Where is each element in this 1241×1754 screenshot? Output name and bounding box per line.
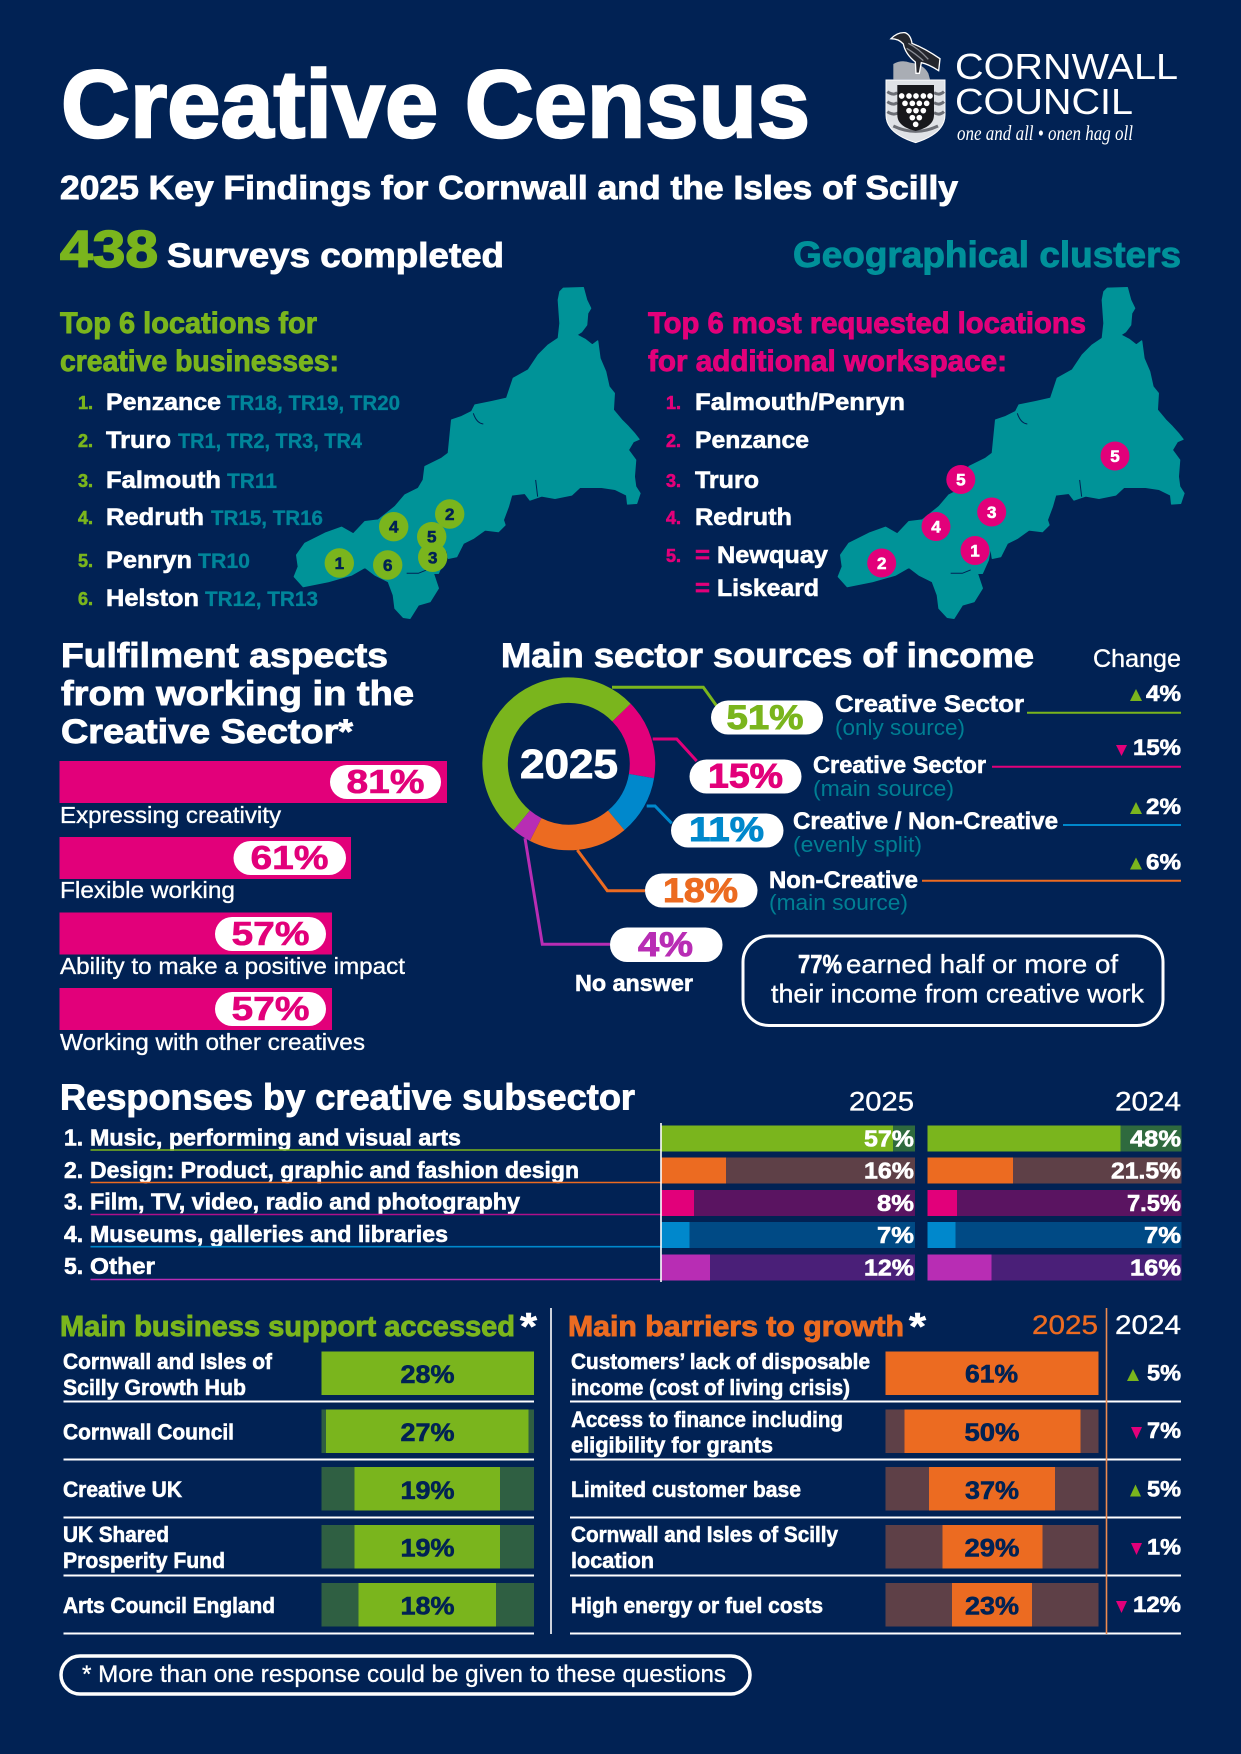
bar: flexible working: 61% (250, 839, 328, 876)
row: growth hub: 28% (400, 1361, 454, 1389)
map marker 1: 1 (970, 542, 980, 560)
heading: responses by creative subsector: Responses by creative subsector (60, 1076, 635, 1118)
row: access to finance: Access to finance including (571, 1407, 843, 1432)
callout: 77% earned half or more (743, 936, 1163, 1026)
bar: flexible working (60, 837, 351, 903)
heading: fulfilment aspects (61, 637, 414, 751)
heading: main barriers to growth: Main barriers to growth (568, 1311, 904, 1343)
row: arts council england: Arts Council England (63, 1593, 275, 1618)
row: access to finance: 50% (964, 1419, 1020, 1447)
footnote (61, 1656, 750, 1694)
bar: expressing creativity: Expressing creativity (60, 802, 281, 828)
change values: income sources (1116, 681, 1181, 874)
list: requested locations: Truro (695, 467, 759, 494)
column headings: subsector years: 2025 (849, 1086, 914, 1116)
logo: Cornwall Council (886, 33, 1178, 145)
bar: working with other creatives: 57% (232, 990, 310, 1027)
map marker 2 (867, 548, 896, 578)
table: responses by creative subsector (64, 1123, 1182, 1282)
row: location: location (571, 1548, 654, 1573)
column headings: barriers years: 2025 (1032, 1310, 1098, 1340)
map marker 2 (435, 499, 464, 529)
list: top 6 locations: TR11 (227, 470, 277, 493)
panel: main barriers to growth (570, 1349, 1181, 1634)
callout: 11% evenly split: Creative / Non-Creative (793, 808, 1058, 835)
row: access to finance: eligibility for grants (571, 1432, 773, 1458)
list: top 6 locations: 3. (78, 471, 93, 491)
heading: top 6 most requested locations: Top 6 most requested locations (648, 307, 1086, 340)
bar: flexible working: Flexible working (60, 877, 235, 903)
donut chart: income sources (495, 690, 642, 838)
list: requested locations: Liskeard (717, 575, 819, 602)
heading: main barriers to growth (568, 1306, 926, 1348)
heading: main sector sources of income: Main sector sources of income (501, 637, 1034, 675)
footnote: * More than one response could be given to these questions (82, 1661, 726, 1688)
logo wordmark (955, 46, 1178, 145)
list: top 6 locations: Redruth (106, 504, 204, 531)
row: limited customer base: 37% (965, 1477, 1019, 1505)
heading: change: Change (1093, 645, 1181, 673)
row: growth hub: Scilly Growth Hub (63, 1375, 246, 1400)
row: arts council england: 18% (400, 1592, 454, 1620)
row: limited customer base: Limited customer base (571, 1477, 801, 1502)
column headings: subsector years: 2024 (1115, 1086, 1181, 1116)
list: top 6 locations: Truro (106, 427, 171, 454)
list: top 6 locations: 4. (78, 508, 93, 528)
map marker 1 (960, 536, 990, 565)
row: film, tv, video, radio and photography: Film, TV, video, radio and photography (90, 1188, 520, 1214)
row: museums, galleries and libraries: Museums, galleries and libraries (90, 1221, 448, 1247)
heading: geographical clusters: Geographical clusters (793, 234, 1181, 275)
bar: positive impact: 57% (232, 915, 310, 952)
map marker 2: 2 (445, 505, 454, 524)
change: creative sector main down 15% (1116, 735, 1181, 760)
row: location (570, 1522, 1181, 1576)
column headings: barriers years (1032, 1310, 1181, 1340)
row: design (64, 1157, 1182, 1184)
row: museums, galleries and libraries (64, 1221, 1182, 1248)
callout: 18% non-creative main source: (main source) (769, 890, 908, 915)
heading: main business support accessed: Main business support accessed (60, 1311, 515, 1343)
callout: 4% no answer: No answer (575, 970, 693, 996)
callout: 11% evenly split (671, 808, 1181, 857)
panel: main business support (63, 1349, 534, 1634)
list: requested locations: Newquay (717, 542, 828, 569)
heading: fulfilment aspects: Creative Sector* (61, 713, 354, 751)
callout: 77% earned half or more: 77% (798, 949, 842, 979)
row: access to finance (570, 1407, 1181, 1460)
row: design: 21.5% (1111, 1158, 1181, 1184)
row: growth hub: Cornwall and Isles of (63, 1349, 272, 1374)
row: music, performing and visual arts: Music, performing and visual arts (90, 1124, 461, 1150)
row: uk shared prosperity fund: 19% (400, 1534, 454, 1562)
heading: top 6 most requested locations: for additional workspace: (648, 345, 1007, 378)
bar: positive impact (60, 912, 405, 979)
bar: expressing creativity (60, 761, 447, 828)
column headings: subsector years (849, 1086, 1181, 1116)
map marker 5 Newquay (946, 465, 975, 494)
list: requested locations: Penzance (695, 427, 809, 454)
row: energy or fuel costs: 23% (965, 1592, 1019, 1620)
row: energy or fuel costs (570, 1583, 1181, 1634)
connector lines (525, 687, 717, 944)
list: top 6 locations: Penryn (106, 547, 192, 574)
callout: 51% creative sector only source (711, 691, 1181, 740)
list: top 6 locations: 2. (78, 431, 93, 451)
list: top 6 locations: 5. (78, 551, 93, 571)
map: top 6 creative business locations (294, 288, 640, 618)
row: museums, galleries and libraries: 7% (1144, 1222, 1181, 1248)
map marker 5 Newquay: 5 (956, 470, 966, 490)
row: cornwall council (63, 1410, 534, 1460)
callout: 4% no answer (575, 926, 722, 996)
list: top 6 locations: TR1, TR2, TR3, TR4 (178, 430, 362, 453)
bar: expressing creativity: 81% (346, 763, 424, 800)
bar: positive impact: Ability to make a positive impact (60, 953, 405, 979)
row: music, performing and visual arts: 1. (64, 1124, 83, 1150)
callout: 18% non-creative main source: Non-Creative (769, 867, 918, 894)
row: location: Cornwall and Isles of Scilly (571, 1522, 838, 1547)
icon: raven and shield crest (886, 33, 945, 143)
row: creative uk: 19% (400, 1477, 454, 1505)
heading: main business support accessed: * (520, 1306, 537, 1348)
callout: 51% creative sector only source: Creative Sector (835, 691, 1024, 718)
list: requested locations: = (695, 575, 710, 602)
row: lack of disposable income: 61% (965, 1360, 1018, 1388)
row: location: 1% (1147, 1534, 1181, 1560)
map marker 3 (418, 543, 447, 572)
column headings: barriers years: 2024 (1115, 1310, 1181, 1340)
change: creative sector only up 4% (1130, 681, 1181, 706)
list: requested locations: 3. (666, 471, 681, 491)
row: music, performing and visual arts: 57% (864, 1126, 914, 1152)
row: creative uk (63, 1467, 534, 1518)
map: requested workspace locations (838, 288, 1184, 618)
row: music, performing and visual arts: 48% (1130, 1126, 1181, 1152)
row: lack of disposable income: 5% (1147, 1360, 1181, 1386)
callout: 51% creative sector only source: (only source) (835, 715, 965, 740)
row: film, tv, video, radio and photography: 8% (877, 1190, 914, 1216)
row: uk shared prosperity fund (63, 1522, 534, 1576)
bar: working with other creatives (60, 988, 365, 1055)
callout: 11% evenly split: 11% (689, 811, 764, 849)
row: limited customer base (570, 1467, 1181, 1518)
row: music, performing and visual arts (64, 1124, 1182, 1152)
list: top 6 locations: Penzance (106, 389, 221, 416)
map marker 3: 3 (428, 548, 437, 567)
heading: top 6 locations for creative businesses: Top 6 locations for (60, 307, 317, 340)
list: top 6 locations: Helston (106, 585, 199, 612)
map marker 5: 5 (427, 528, 436, 547)
list: top 6 locations: TR15, TR16 (211, 507, 323, 530)
row: film, tv, video, radio and photography (64, 1188, 1182, 1216)
callout: 51% creative sector only source: 51% (726, 699, 804, 737)
change: creative sector only up 4%: 4% (1146, 681, 1181, 706)
list: requested locations (666, 389, 905, 602)
callout: 15% creative sector main source: Creative Sector (813, 752, 986, 779)
row: film, tv, video, radio and photography: 7.5% (1127, 1190, 1181, 1216)
list: requested locations: 1. (666, 393, 681, 413)
map marker 4 (922, 512, 950, 541)
callout: 15% creative sector main source: (main source) (813, 776, 954, 801)
row: energy or fuel costs: High energy or fuel costs (571, 1593, 823, 1618)
logo wordmark: COUNCIL (955, 81, 1133, 122)
list: top 6 locations: 6. (78, 589, 93, 609)
list: top 6 locations: Falmouth (106, 467, 221, 494)
row: energy or fuel costs: 12% (1133, 1592, 1181, 1617)
callout: 15% creative sector main source: 15% (708, 758, 783, 796)
list: requested locations: Redruth (695, 504, 792, 531)
callout: 77% earned half or more: earned half or more of (846, 949, 1119, 979)
row: museums, galleries and libraries: 7% (877, 1222, 914, 1248)
title: Creative Census (61, 51, 810, 158)
surveys completed stat: 438 (60, 221, 158, 279)
heading: fulfilment aspects: Fulfilment aspects (61, 637, 388, 675)
surveys completed stat (60, 221, 504, 279)
map marker 3: 3 (987, 503, 996, 522)
row: design: Design: Product, graphic and fashion design (90, 1157, 579, 1183)
row: uk shared prosperity fund: UK Shared (63, 1522, 169, 1547)
callout: 18% non-creative main source: 18% (663, 872, 738, 910)
list: requested locations: 2. (666, 431, 681, 451)
callout: 11% evenly split: (evenly split) (793, 832, 922, 857)
bar: working with other creatives: Working with other creatives (60, 1029, 365, 1055)
row: growth hub (63, 1349, 534, 1402)
row: other: 12% (864, 1254, 914, 1280)
callout: 18% non-creative main source (645, 867, 1181, 915)
map marker 5 Liskeard (1100, 442, 1130, 470)
row: arts council england (63, 1583, 534, 1634)
map marker 5 (417, 522, 446, 551)
logo wordmark: CORNWALL (955, 46, 1178, 87)
list: requested locations: 5. (666, 546, 681, 566)
map marker 5 Liskeard: 5 (1110, 447, 1120, 466)
list: requested locations: 4. (666, 508, 681, 528)
change: non-creative up 6% (1130, 850, 1181, 874)
row: cornwall council: 27% (400, 1419, 454, 1447)
change: evenly split up 2%: 2% (1146, 794, 1181, 819)
row: creative uk: Creative UK (63, 1477, 183, 1502)
heading: top 6 most requested locations (648, 307, 1086, 378)
bar chart: fulfilment aspects (60, 761, 447, 1055)
row: other: 16% (1130, 1254, 1181, 1280)
row: design: 2. (64, 1157, 83, 1183)
row: museums, galleries and libraries: 4. (64, 1221, 83, 1247)
callout: 15% creative sector main source (690, 752, 1181, 801)
list: top 6 locations: TR10 (198, 550, 250, 573)
map marker 4 (379, 512, 408, 541)
row: lack of disposable income: income (cost of living crisis) (571, 1375, 850, 1400)
row: lack of disposable income (570, 1349, 1181, 1402)
list: top 6 locations (78, 389, 400, 612)
row: limited customer base: 5% (1147, 1476, 1181, 1502)
list: top 6 locations: 1. (78, 393, 93, 413)
row: film, tv, video, radio and photography: 3. (64, 1188, 83, 1214)
callout: 77% earned half or more: their income from creative work (771, 978, 1145, 1008)
row: other: 5. (64, 1253, 83, 1279)
list: top 6 locations: TR12, TR13 (205, 588, 318, 611)
map marker 6 (373, 550, 402, 580)
change: creative sector main down 15%: 15% (1133, 735, 1181, 760)
heading: top 6 locations for creative businesses: creative businesses: (60, 345, 339, 378)
map marker 1 (325, 548, 354, 578)
map marker 6: 6 (383, 556, 392, 575)
logo wordmark: one and all • onen hag oll (957, 121, 1133, 145)
list: requested locations: = (695, 542, 710, 569)
surveys completed stat: Surveys completed (167, 237, 504, 275)
list: requested locations: Falmouth/Penryn (695, 389, 905, 416)
heading: top 6 locations for creative businesses (60, 307, 339, 378)
callout: 4% no answer: 4% (638, 926, 693, 964)
list: top 6 locations: TR18, TR19, TR20 (227, 392, 400, 415)
row: cornwall council: Cornwall Council (63, 1420, 234, 1444)
row: other (64, 1253, 1182, 1280)
map marker 3 (977, 498, 1006, 526)
row: other: Other (90, 1253, 155, 1279)
heading: fulfilment aspects: from working in the (61, 675, 414, 713)
map marker 4: 4 (931, 518, 941, 536)
row: location: 29% (964, 1534, 1020, 1562)
change: non-creative up 6%: 6% (1146, 850, 1181, 874)
map marker 1: 1 (335, 554, 344, 573)
map marker 2: 2 (877, 554, 886, 573)
row: access to finance: 7% (1147, 1418, 1181, 1443)
heading: main barriers to growth: * (909, 1306, 926, 1348)
change: evenly split up 2% (1130, 794, 1181, 819)
row: lack of disposable income: Customers’ lack of disposable (571, 1349, 870, 1374)
map marker 4: 4 (389, 518, 399, 537)
donut chart: income sources: 2025 (520, 741, 618, 787)
subtitle: 2025 Key Findings for Cornwall and the Isles of Scilly (60, 169, 959, 206)
row: design: 16% (864, 1158, 914, 1184)
row: uk shared prosperity fund: Prosperity Fund (63, 1548, 225, 1573)
